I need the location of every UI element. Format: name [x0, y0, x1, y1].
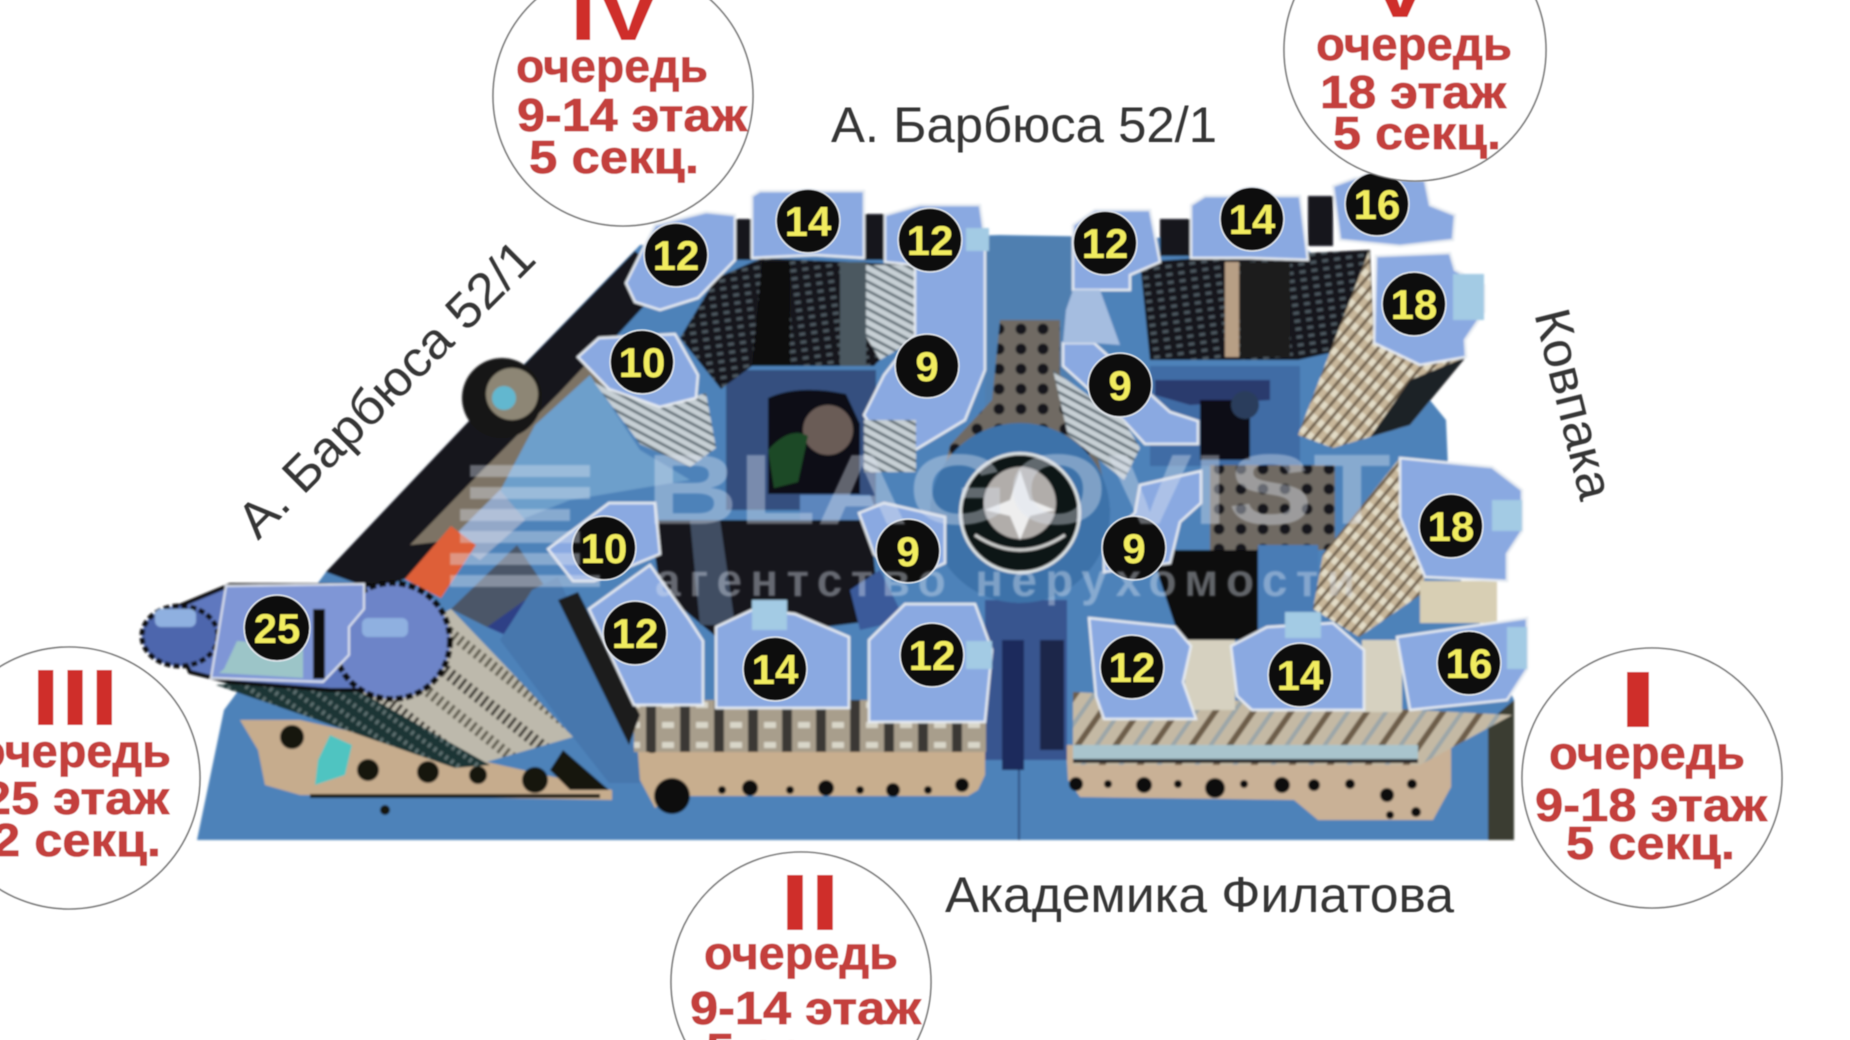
roof top left 12	[626, 212, 735, 310]
courtyard IV	[726, 370, 880, 520]
street diagonal: А. Барбюса 52/1	[226, 229, 546, 549]
number badges	[244, 172, 1501, 707]
roof lower left 10	[548, 503, 660, 581]
badge lower 10: 10	[581, 525, 627, 572]
badge lower 10	[572, 516, 636, 580]
roof top right 14	[1191, 196, 1308, 260]
badge lower left 14	[743, 637, 807, 701]
pool	[315, 735, 352, 785]
badge top centre 12: 12	[907, 217, 953, 264]
badge top right 16	[1345, 172, 1409, 236]
callout phase I: 9-18 этаж	[1535, 779, 1767, 831]
courtyard I	[1150, 545, 1318, 640]
callout phase II	[671, 852, 931, 1040]
block I row facade	[1073, 692, 1512, 765]
annex roof	[450, 490, 525, 560]
badge top left 14: 14	[785, 198, 832, 245]
left courtyard	[490, 375, 690, 520]
callout phase II: 9-14 этаж	[690, 982, 921, 1034]
watermark name: BLAGOVIST	[646, 434, 1391, 546]
badge lower right 16	[1437, 631, 1501, 695]
callout phase II: II	[780, 858, 840, 947]
ground	[197, 235, 1514, 840]
roof lower left 12	[589, 565, 703, 705]
badge top centre 12	[898, 208, 962, 272]
facade upper 10	[594, 382, 716, 467]
callout phase I: I	[1617, 655, 1659, 744]
badge upper 18: 18	[1391, 281, 1437, 328]
badge upper left 9: 9	[915, 343, 939, 390]
callout phase V: очередь	[1316, 18, 1512, 70]
badge lower centre 12: 12	[909, 632, 955, 679]
badge tower 25: 25	[254, 605, 300, 652]
roof lower 9 right	[1104, 471, 1201, 572]
callout phase IV: 5 секц.	[529, 131, 699, 183]
badge lower 18	[1419, 494, 1483, 558]
block II row facade	[634, 700, 986, 752]
badge lower centre 12	[900, 623, 964, 687]
callout phase I: 5 секц.	[1566, 817, 1735, 869]
badge lower right 14: 14	[1277, 652, 1324, 699]
badge lower right 9	[1102, 516, 1166, 580]
badge lower left 9	[876, 519, 940, 583]
callout phase I: очередь	[1549, 727, 1745, 779]
gap panels block I	[1185, 640, 1402, 712]
callout phase III	[0, 647, 200, 909]
watermark logo	[450, 465, 600, 587]
tab on lower centre 12	[966, 641, 992, 669]
badge lower right 16: 16	[1446, 640, 1492, 687]
street top: А. Барбюса 52/1	[831, 97, 1217, 153]
roof centre 12 and wing	[864, 205, 985, 450]
badge top right 14: 14	[1229, 196, 1276, 243]
badge upper right 9	[1088, 353, 1152, 417]
roof lower centre 12	[869, 604, 992, 722]
callout phase V: 5 секц.	[1333, 107, 1501, 159]
badge lower left 14: 14	[752, 646, 799, 693]
badge top right 12: 12	[1082, 220, 1128, 267]
lower 18 building	[1313, 458, 1522, 637]
badge top left 14	[776, 189, 840, 253]
badge upper 18	[1382, 272, 1446, 336]
roof lower right 14	[1231, 623, 1364, 710]
fountain	[930, 423, 1110, 603]
vertical road	[985, 600, 1067, 840]
right dark strip	[1488, 700, 1514, 840]
roof lower 9 left	[859, 503, 945, 581]
badge top right 14	[1220, 187, 1284, 251]
navy road wedge	[487, 600, 590, 680]
badge upper right 9: 9	[1108, 362, 1132, 409]
right planter	[1066, 743, 1451, 820]
badge lower right 14	[1268, 643, 1332, 707]
grey annex by court	[451, 545, 548, 627]
watermark subtitle: агентство нерухомости	[655, 554, 1355, 606]
badge lower left 9: 9	[896, 528, 920, 575]
tower 25	[142, 583, 573, 768]
badge upper 10	[610, 330, 674, 394]
roof top right 16	[1333, 178, 1455, 246]
facade wing 9 right	[1053, 370, 1140, 480]
badge top left 12: 12	[653, 232, 699, 279]
facade below upper 9	[864, 420, 916, 472]
aerial site plan scene	[142, 178, 1527, 840]
callout phase IV: очередь	[516, 40, 708, 92]
roof upper 18	[1374, 253, 1484, 365]
callout phase IV	[493, 0, 753, 226]
dark edge block II	[558, 592, 640, 745]
street bottom: Академика Филатова	[945, 867, 1454, 923]
left planter	[240, 720, 612, 800]
diagonal walkway	[410, 360, 612, 545]
roof lower right 16	[1397, 618, 1527, 710]
callout phase V	[1284, 0, 1546, 181]
badge lower right 9: 9	[1122, 525, 1146, 572]
callout phase II: очередь	[704, 927, 898, 979]
tab on lower left 14	[752, 600, 787, 630]
plaza block right	[1210, 465, 1335, 550]
street right: Ковпака	[1523, 303, 1625, 505]
middle planter trees	[644, 737, 969, 814]
badge lower left 12: 12	[612, 610, 658, 657]
blue road	[500, 577, 650, 783]
roof lower left 14	[716, 609, 849, 708]
block IV facade	[680, 258, 915, 389]
callout phase III: III	[31, 653, 119, 742]
right planter trees	[1069, 777, 1421, 819]
central avenue	[985, 237, 1073, 447]
street labels	[226, 97, 1625, 923]
watermark	[450, 434, 1391, 606]
badge upper left 9	[895, 334, 959, 398]
courtyard V	[1150, 366, 1300, 466]
badge upper 10: 10	[619, 339, 665, 386]
tab on upper 18	[1453, 274, 1484, 320]
roof top 14	[752, 191, 864, 258]
callout phase IV: 9-14 этаж	[517, 89, 747, 141]
gaps between top roofs	[736, 196, 1333, 260]
diagonal tree strip	[326, 251, 668, 590]
badge lower right 12	[1100, 635, 1164, 699]
roof wing 9 right	[1063, 343, 1198, 444]
badge top right 12	[1073, 211, 1137, 275]
badge lower left 12	[603, 601, 667, 665]
badge lower right 12: 12	[1109, 644, 1155, 691]
roof top right 12	[1073, 210, 1160, 290]
callout phase V: 18 этаж	[1320, 66, 1506, 118]
central plaza	[935, 320, 1110, 590]
roundabout garden	[462, 358, 542, 438]
courtyard II	[650, 520, 905, 640]
roof lower right 12	[1089, 618, 1196, 719]
tab on lower right 14	[1285, 612, 1321, 638]
badge top right 16: 16	[1354, 181, 1400, 228]
left planter trees	[280, 725, 609, 815]
tab on centre 12	[966, 228, 989, 251]
tennis court	[405, 526, 476, 598]
badge top left 12	[644, 223, 708, 287]
badge lower 18: 18	[1428, 503, 1474, 550]
link roof above wing	[1063, 290, 1120, 345]
tab on lower right 16	[1507, 627, 1527, 669]
middle planter	[634, 700, 985, 808]
block V facade	[1140, 250, 1466, 448]
badge tower 25	[244, 595, 310, 661]
roof upper 10	[578, 334, 698, 407]
callout phase I	[1522, 648, 1782, 908]
